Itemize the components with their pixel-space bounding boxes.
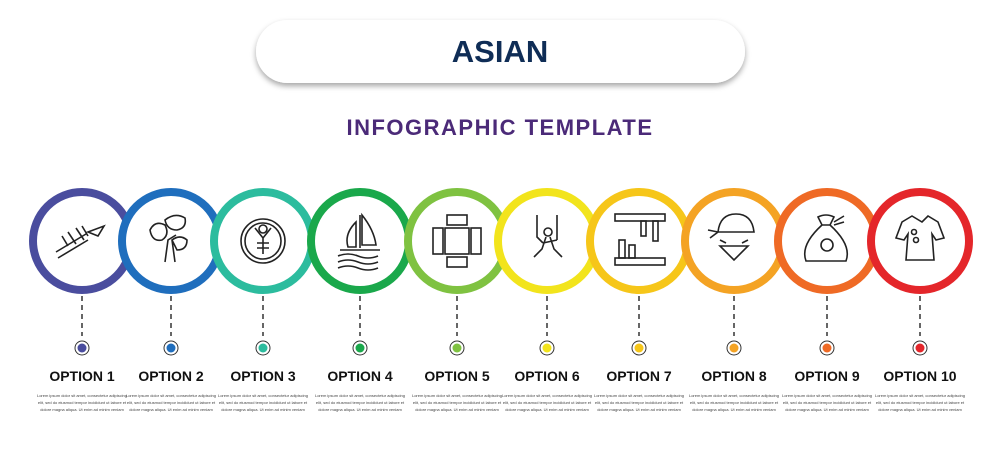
option 1: dolore magna aliqua. Ut enim ad minim veniam — [40, 407, 124, 412]
icon: blocks — [615, 214, 665, 265]
option 2: Lorem ipsum dolor sit amet, consectetur adipiscing — [126, 393, 216, 398]
option 9 — [778, 192, 876, 412]
option 10 — [871, 192, 969, 412]
icon: money bag — [805, 215, 847, 261]
option 6 — [498, 192, 596, 412]
icon: tatami — [433, 215, 481, 267]
option 1: Lorem ipsum dolor sit amet, consectetur adipiscing — [37, 393, 127, 398]
option 10: Lorem ipsum dolor sit amet, consectetur adipiscing — [875, 393, 965, 398]
subtitle: INFOGRAPHIC TEMPLATE — [346, 115, 654, 140]
option 9: elit, sed do eiusmod tempor incididunt ut labore et — [783, 400, 872, 405]
icon: ninja — [708, 214, 754, 260]
option 4: Lorem ipsum dolor sit amet, consectetur adipiscing — [315, 393, 405, 398]
icon: sailboat — [338, 215, 380, 270]
icon: kimono — [896, 216, 944, 260]
option 5 — [408, 192, 506, 412]
option 4: dolore magna aliqua. Ut enim ad minim veniam — [318, 407, 402, 412]
option 8: elit, sed do eiusmod tempor incididunt ut labore et — [690, 400, 779, 405]
option 7: elit, sed do eiusmod tempor incididunt ut labore et — [595, 400, 684, 405]
option 9: Lorem ipsum dolor sit amet, consectetur adipiscing — [782, 393, 872, 398]
option 7: dolore magna aliqua. Ut enim ad minim veniam — [597, 407, 681, 412]
option 2: dolore magna aliqua. Ut enim ad minim veniam — [129, 407, 213, 412]
option 7: Lorem ipsum dolor sit amet, consectetur adipiscing — [594, 393, 684, 398]
option 8 — [685, 192, 783, 412]
option 7 — [590, 192, 688, 412]
option 2: OPTION 2 — [138, 368, 204, 384]
option 3 — [214, 192, 312, 412]
option 6: Lorem ipsum dolor sit amet, consectetur adipiscing — [502, 393, 592, 398]
option 10: dolore magna aliqua. Ut enim ad minim veniam — [878, 407, 962, 412]
option 6: dolore magna aliqua. Ut enim ad minim veniam — [505, 407, 589, 412]
icon: acrobat — [534, 215, 562, 257]
option 5: dolore magna aliqua. Ut enim ad minim veniam — [415, 407, 499, 412]
icon: yen coin — [241, 219, 285, 263]
option 5: elit, sed do eiusmod tempor incididunt ut labore et — [413, 400, 502, 405]
option 6: OPTION 6 — [514, 368, 580, 384]
option 3: Lorem ipsum dolor sit amet, consectetur adipiscing — [218, 393, 308, 398]
option 1: elit, sed do eiusmod tempor incididunt ut labore et — [38, 400, 127, 405]
option 1 — [33, 192, 131, 412]
title pill: ASIAN — [452, 34, 548, 69]
option 9: OPTION 9 — [794, 368, 860, 384]
icon: firecrackers — [56, 226, 104, 258]
option 5: OPTION 5 — [424, 368, 490, 384]
option 8: dolore magna aliqua. Ut enim ad minim veniam — [692, 407, 776, 412]
option 2 — [122, 192, 220, 412]
option 9: dolore magna aliqua. Ut enim ad minim veniam — [785, 407, 869, 412]
option 10: elit, sed do eiusmod tempor incididunt ut labore et — [876, 400, 965, 405]
option 4 — [311, 192, 409, 412]
option 8: OPTION 8 — [701, 368, 767, 384]
option 10: OPTION 10 — [883, 368, 957, 384]
title pill — [256, 20, 745, 83]
option 2: elit, sed do eiusmod tempor incididunt ut labore et — [127, 400, 216, 405]
icon: tree — [150, 215, 187, 262]
option 1: OPTION 1 — [49, 368, 115, 384]
option 5: Lorem ipsum dolor sit amet, consectetur adipiscing — [412, 393, 502, 398]
option 4: elit, sed do eiusmod tempor incididunt ut labore et — [316, 400, 405, 405]
option 3: elit, sed do eiusmod tempor incididunt ut labore et — [219, 400, 308, 405]
option 3: dolore magna aliqua. Ut enim ad minim veniam — [221, 407, 305, 412]
option 4: OPTION 4 — [327, 368, 393, 384]
option 8: Lorem ipsum dolor sit amet, consectetur adipiscing — [689, 393, 779, 398]
option 6: elit, sed do eiusmod tempor incididunt ut labore et — [503, 400, 592, 405]
option 3: OPTION 3 — [230, 368, 296, 384]
option 7: OPTION 7 — [606, 368, 672, 384]
